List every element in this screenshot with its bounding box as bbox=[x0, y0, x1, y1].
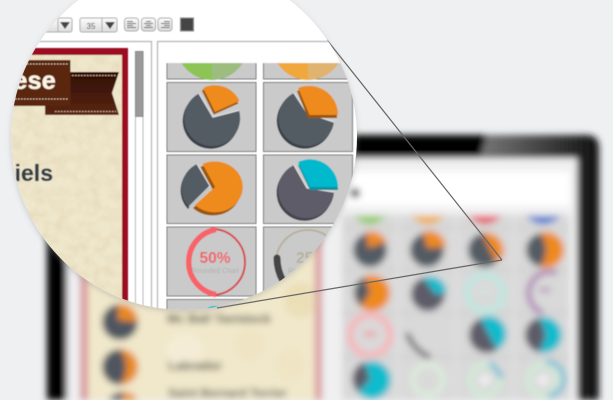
left panel frame bbox=[39, 40, 328, 308]
list item label: second: Labrador bbox=[168, 359, 222, 373]
blurred laptop with chart list bbox=[47, 135, 599, 400]
list item: pie three bbox=[108, 392, 138, 400]
pie chart: grey and orange one bbox=[183, 85, 240, 149]
ribbon front bbox=[14, 59, 72, 107]
rounded chart 50%: 50% bbox=[199, 250, 231, 267]
row four pies and rings bbox=[352, 361, 564, 399]
list item heading fragment: s bbox=[8, 223, 19, 245]
ribbon tail bbox=[45, 72, 119, 115]
pie chart: grey and orange two bbox=[277, 86, 338, 149]
rounded chart 25% bbox=[273, 228, 327, 282]
row three pies and rings bbox=[350, 315, 562, 357]
rounded chart 50%: Rounded Chart bbox=[192, 268, 239, 275]
list item: pie two bbox=[102, 349, 138, 385]
list item: pie one bbox=[102, 304, 138, 340]
toolbar: colour swatch bbox=[180, 18, 194, 31]
row one pies bbox=[353, 231, 564, 268]
toolbar: size dropdown: 35 bbox=[87, 22, 96, 31]
lens soft shadow bbox=[11, 0, 357, 312]
row two pies and rings bbox=[354, 272, 557, 313]
list item label: third: Saint Bernard Terrier bbox=[168, 386, 287, 400]
chart grid cells bbox=[167, 60, 352, 312]
white mask above first row bbox=[160, 43, 360, 63]
first row green and orange charts bbox=[181, 62, 339, 81]
magnifier lens bbox=[0, 0, 360, 313]
laptop screen bbox=[67, 158, 577, 400]
top row colour arcs bbox=[354, 216, 561, 224]
chart grid background bbox=[342, 215, 570, 400]
scrollbar bbox=[136, 52, 143, 312]
lens pointer lines bbox=[217, 40, 502, 308]
list item label: first: Mc Ball Tavistock bbox=[167, 312, 271, 326]
rounded chart 25%: Rounded Chart bbox=[288, 268, 336, 275]
list panel with cream texture bbox=[80, 200, 322, 400]
rounded chart 25%: 25% bbox=[296, 250, 327, 267]
toolbar: font dropdown bbox=[46, 17, 73, 33]
pie chart: orange majority bbox=[181, 161, 243, 215]
pie chart: grey and teal bbox=[277, 159, 338, 221]
laptop bezel bbox=[47, 135, 599, 400]
toolbar: size dropdown bbox=[80, 18, 117, 32]
template paper with red border bbox=[11, 47, 129, 301]
toolbar: alignment buttons bbox=[124, 18, 172, 31]
toolbar strip bbox=[345, 172, 570, 206]
rounded chart 50% bbox=[189, 229, 245, 295]
brown ribbon banner bbox=[0, 60, 119, 115]
partly visible chart in next row bbox=[206, 306, 220, 308]
